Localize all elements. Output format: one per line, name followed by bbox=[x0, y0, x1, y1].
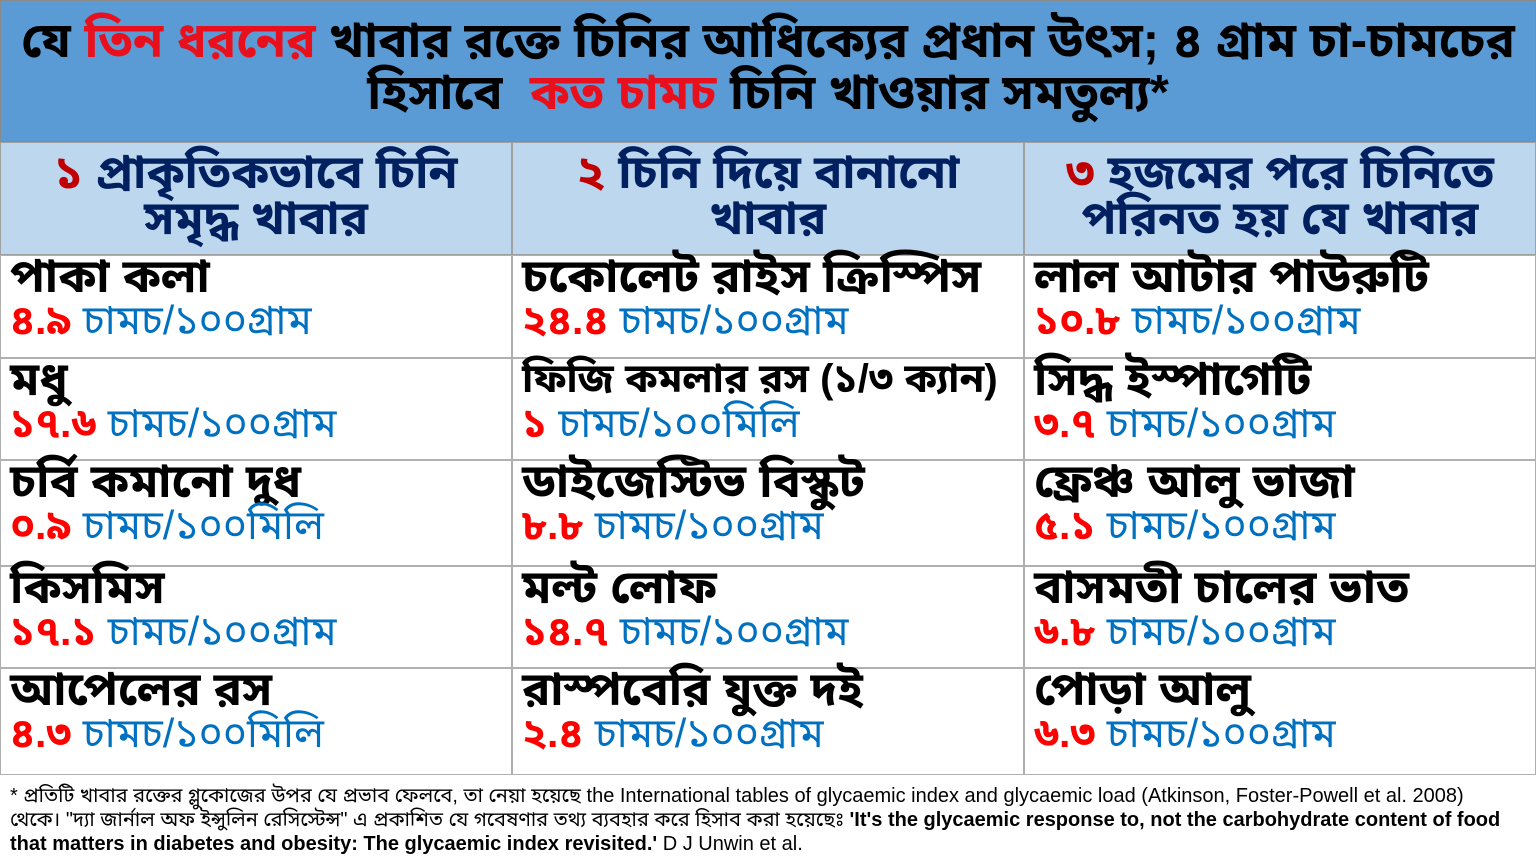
cell: ১ চামচ/১০০মিলি bbox=[522, 400, 800, 446]
cell: ফ্রেঞ্চ আলু ভাজা bbox=[1034, 454, 1355, 507]
heading: made with sugar: খাবার bbox=[710, 191, 826, 244]
cell bbox=[0, 460, 512, 566]
cell: সিদ্ধ ইস্পাগেটি bbox=[1034, 352, 1311, 405]
cell: লাল আটার পাউরুটি bbox=[1034, 249, 1429, 302]
cell bbox=[0, 255, 512, 358]
cell: ০.৯ চামচ/১০০মিলি bbox=[10, 502, 324, 548]
title bbox=[0, 0, 1536, 142]
cell: ৬.৮ চামচ/১০০গ্রাম bbox=[1034, 608, 1336, 654]
heading: naturally sugar-rich bbox=[0, 142, 512, 255]
cell: ১৭.১ চামচ/১০০গ্রাম bbox=[10, 608, 337, 654]
heading: converted after digestion: পরিনত হয় যে খাবার bbox=[1082, 191, 1478, 244]
cell: ২.৪ চামচ/১০০গ্রাম bbox=[522, 710, 824, 756]
cell bbox=[1024, 460, 1536, 566]
food table bbox=[0, 249, 1536, 775]
cell: ১০.৮ চামচ/১০০গ্রাম bbox=[1034, 297, 1361, 343]
cell: ফিজি কমলার রস (১/৩ ক্যান) bbox=[522, 357, 998, 401]
cell: বাসমতী চালের ভাত bbox=[1034, 560, 1409, 613]
cell bbox=[0, 358, 512, 460]
heading: converted after digestion: ৩ হজমের পরে চিনিতে bbox=[1066, 145, 1494, 198]
column headings bbox=[0, 142, 1536, 255]
heading: made with sugar: ২ চিনি দিয়ে বানানো bbox=[577, 145, 959, 198]
cell bbox=[1024, 255, 1536, 358]
cell: পাকা কলা bbox=[10, 249, 210, 302]
cell bbox=[1024, 566, 1536, 668]
cell bbox=[512, 255, 1024, 358]
cell bbox=[512, 460, 1024, 566]
heading: naturally sugar-rich: ১ প্রাকৃতিকভাবে চিনি bbox=[54, 145, 458, 198]
cell: মল্ট লোফ bbox=[522, 560, 717, 613]
cell: ৪.৩ চামচ/১০০মিলি bbox=[10, 710, 324, 756]
heading: naturally sugar-rich: সমৃদ্ধ খাবার bbox=[144, 191, 368, 244]
cell bbox=[0, 668, 512, 775]
cell: চর্বি কমানো দুধ bbox=[10, 454, 301, 507]
cell bbox=[512, 566, 1024, 668]
cell: ৩.৭ চামচ/১০০গ্রাম bbox=[1034, 400, 1336, 446]
cell: পোড়া আলু bbox=[1034, 662, 1251, 715]
cell: ৬.৩ চামচ/১০০গ্রাম bbox=[1034, 710, 1336, 756]
footnote: * প্রতিটি খাবার রক্তের গ্লুকোজের উপর যে প্রভাব ফেলবে, তা নেয়া হয়েছে the International tables of glycaemic index and glycaemic load (Atkinson, Foster-Powell et al. 2008) থেকে। "দ্যা জার্নাল অফ ইন্সুলিন রেসিস্টেন্স" এ প্রকাশিত যে গবেষণার তথ্য ব্যবহার করে হিসাব করা হয়েছেঃ 'It's the glycaemic response to, not the carbohydrate content of food that matters in diabetes and obesity: The glycaemic index revisited.' D J Unwin et al. bbox=[10, 785, 1500, 855]
cell: ২৪.৪ চামচ/১০০গ্রাম bbox=[522, 297, 849, 343]
heading: made with sugar bbox=[512, 142, 1024, 255]
cell: ৪.৯ চামচ/১০০গ্রাম bbox=[10, 297, 312, 343]
cell: ১৪.৭ চামচ/১০০গ্রাম bbox=[522, 608, 849, 654]
cell: কিসমিস bbox=[10, 560, 165, 613]
cell: রাস্পবেরি যুক্ত দই bbox=[522, 662, 863, 715]
title: যে তিন ধরনের খাবার রক্তে চিনির আধিক্যের প্রধান উৎস; ৪ গ্রাম চা-চামচের bbox=[21, 14, 1515, 68]
heading: converted after digestion bbox=[1024, 142, 1536, 255]
cell: ৮.৮ চামচ/১০০গ্রাম bbox=[522, 502, 824, 548]
title: হিসাবে কত চামচ চিনি খাওয়ার সমতুল্য* bbox=[367, 66, 1169, 120]
cell: মধু bbox=[10, 352, 68, 405]
cell: আপেলের রস bbox=[10, 662, 272, 715]
cell: ১৭.৬ চামচ/১০০গ্রাম bbox=[10, 400, 337, 446]
cell bbox=[512, 668, 1024, 775]
cell: ডাইজেস্টিভ বিস্কুট bbox=[522, 454, 865, 507]
cell bbox=[512, 358, 1024, 460]
cell: ৫.১ চামচ/১০০গ্রাম bbox=[1034, 502, 1336, 548]
cell bbox=[1024, 668, 1536, 775]
cell bbox=[1024, 358, 1536, 460]
cell bbox=[0, 566, 512, 668]
cell: চকোলেট রাইস ক্রিস্পিস bbox=[522, 249, 981, 302]
